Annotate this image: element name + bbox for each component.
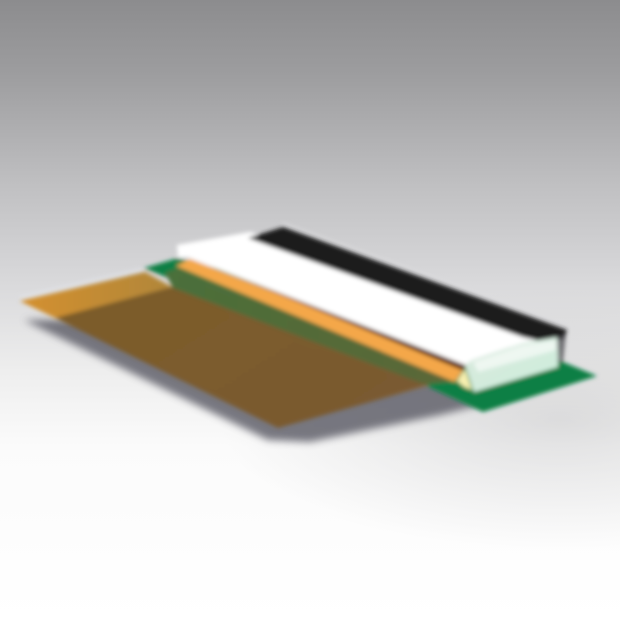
board and connector assembly — [20, 227, 597, 428]
circuit board — [144, 258, 597, 412]
board seen through film — [165, 268, 457, 384]
highlight along film edge — [18, 268, 146, 300]
black side edge — [557, 334, 566, 362]
white housing top — [177, 232, 560, 365]
end face shading — [473, 340, 556, 372]
black latch — [248, 227, 567, 341]
yellow corner highlight — [457, 369, 472, 390]
film flat surface — [20, 272, 174, 319]
highlight along black latch — [280, 223, 570, 331]
cast shadow of film and board — [24, 320, 480, 442]
film shaded surface — [55, 287, 430, 428]
dark slot line — [188, 256, 466, 371]
orange film strip — [176, 259, 465, 382]
housing end face — [465, 337, 558, 392]
background right shading — [220, 290, 620, 550]
